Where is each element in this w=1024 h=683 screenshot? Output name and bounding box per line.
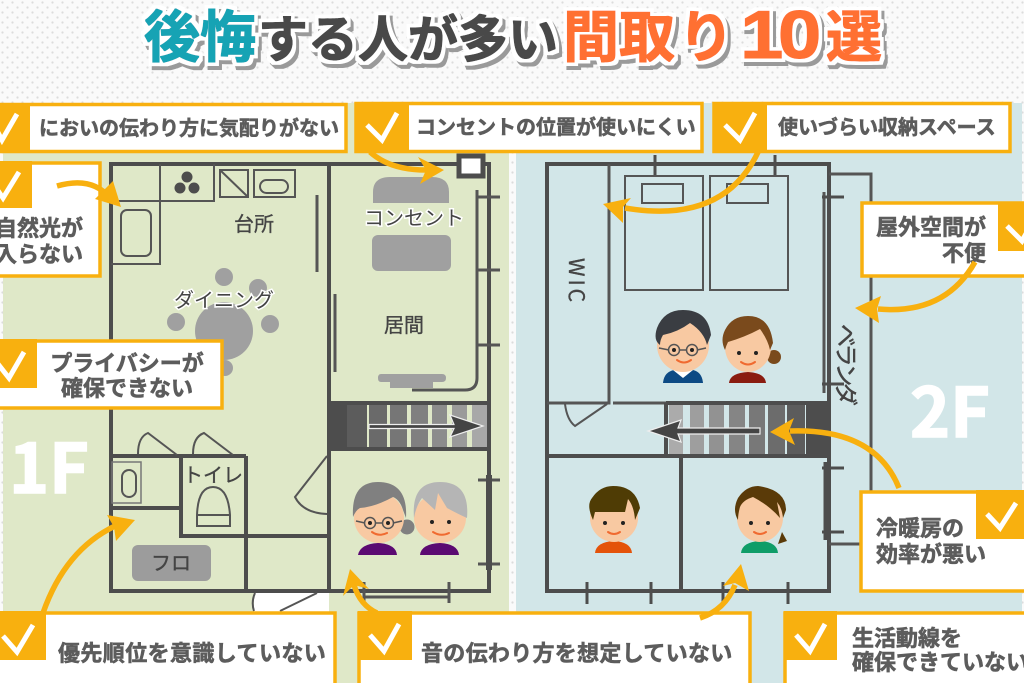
person: mother	[722, 316, 781, 383]
callout: privacy: プライバシーが	[50, 346, 204, 378]
bath: フロ	[151, 547, 191, 576]
outlet label: コンセント	[364, 202, 464, 231]
callout: outlet position: コンセントの位置が使いにくい	[416, 111, 696, 140]
washer	[112, 462, 141, 503]
floor plan: 1F	[9, 156, 500, 612]
1F label: 1F	[9, 414, 89, 513]
callout: smell	[0, 103, 346, 152]
person: father	[656, 310, 711, 383]
callout: outlet position	[355, 102, 702, 152]
callout: outdoor space: 屋外空間が	[876, 210, 986, 242]
TV stand	[378, 374, 446, 388]
1F walls	[111, 164, 500, 603]
callout: priorities	[0, 611, 335, 683]
callout: circulation: 確保できていない	[852, 645, 1024, 677]
dining table	[167, 268, 279, 376]
title: する人が多い	[258, 12, 558, 68]
person: son	[589, 486, 640, 553]
floor plan: 2F	[547, 155, 990, 604]
beds	[625, 176, 788, 290]
callout: air conditioning: 効率が悪い	[876, 537, 986, 569]
callout: privacy	[0, 339, 222, 408]
WIC label: WIC	[562, 258, 592, 302]
arrow: storage	[603, 150, 759, 223]
callout: circulation: 生活動線を	[852, 621, 962, 653]
arrow: natural light	[57, 181, 121, 207]
callout: circulation	[784, 611, 1024, 683]
living sofa	[372, 177, 451, 271]
callout: air conditioning: 冷暖房の	[876, 511, 964, 543]
arrow: outdoor space	[855, 262, 975, 323]
arrow: air conditioning	[770, 418, 899, 488]
callout: smell: においの伝わり方に気配りがない	[39, 112, 339, 141]
arrow: outlet	[370, 152, 444, 184]
doors 1F	[138, 433, 329, 612]
title: 後悔	[144, 6, 256, 69]
kitchen label: 台所	[234, 208, 274, 237]
callout: privacy: 確保できない	[61, 371, 193, 403]
kitchen fixtures	[121, 170, 295, 256]
callout: storage: 使いづらい収納スペース	[778, 111, 996, 140]
callout: priorities: 優先順位を意識していない	[58, 636, 326, 668]
living label: 居間	[384, 309, 424, 338]
callout: outdoor space: 不便	[942, 236, 986, 268]
outlet square	[459, 156, 483, 176]
title: 間取り	[563, 6, 734, 69]
person: grandfather	[414, 482, 467, 555]
title: 選	[826, 6, 882, 69]
2F label: 2F	[910, 358, 990, 457]
arrow: living flow	[700, 564, 749, 618]
2F walls	[547, 155, 871, 604]
callout: natural light	[0, 161, 100, 276]
veranda label: ベランダ	[831, 324, 865, 406]
arrow: sound	[343, 569, 377, 613]
arrow: priorities	[43, 515, 135, 613]
title	[144, 0, 882, 73]
panel: 1F floor background	[3, 103, 509, 683]
door 2F	[565, 404, 607, 426]
stairs 1F	[331, 405, 487, 447]
bath	[132, 545, 211, 581]
toilet	[197, 487, 230, 526]
callout: air conditioning	[861, 490, 1024, 591]
callout: sound: 音の伝わり方を想定していない	[421, 636, 733, 668]
callout: sound	[358, 611, 750, 683]
toilet label: トイレ	[183, 459, 243, 488]
person: daughter	[735, 486, 787, 553]
stairs 2F	[648, 403, 829, 456]
callout: storage	[713, 102, 1010, 152]
dining label: ダイニング	[174, 284, 274, 313]
panel: 2F floor background	[516, 103, 1022, 683]
person: grandmother	[353, 482, 414, 555]
callout: outdoor space	[862, 202, 1024, 276]
